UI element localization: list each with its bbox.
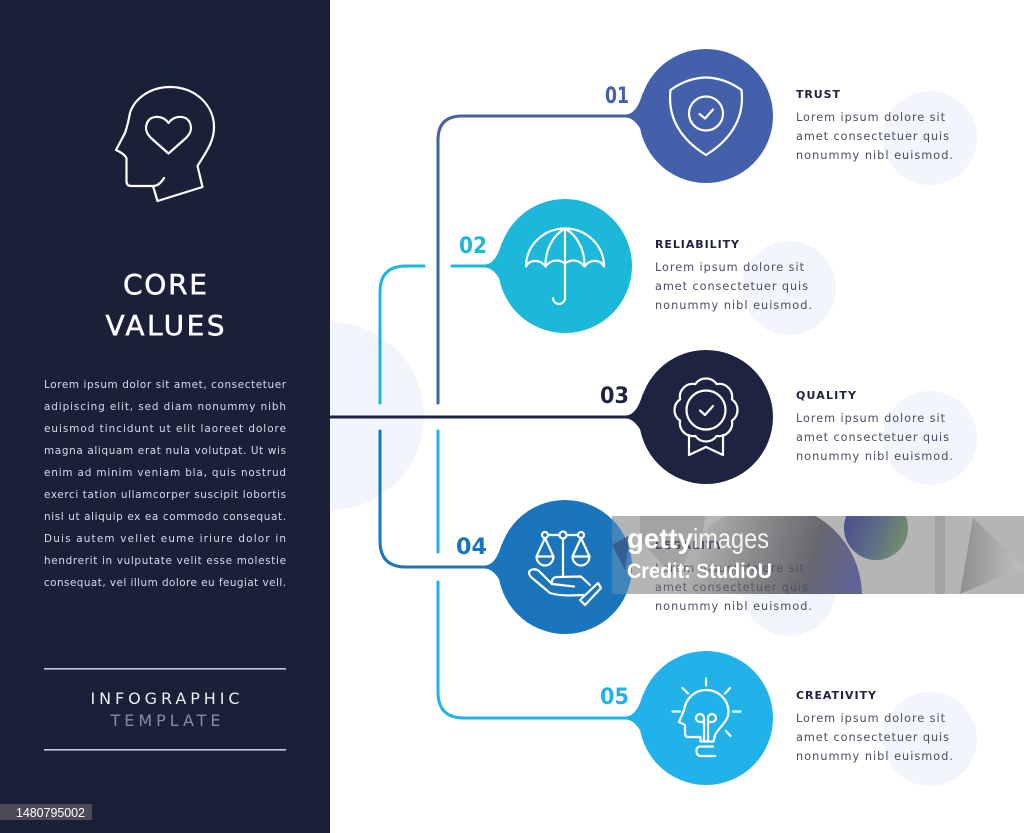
left panel bbox=[0, 0, 330, 833]
paragraph: euismod tincidunt ut elit laoreet dolore bbox=[44, 423, 286, 435]
icon: rosette badge bbox=[674, 378, 738, 455]
number 05: 05 bbox=[600, 685, 629, 710]
paragraph: consequat, vel illum dolore eu feugiat vell. bbox=[44, 577, 286, 589]
text: creativity: Lorem ipsum dolore sit bbox=[796, 712, 946, 725]
text: quality: QUALITY bbox=[796, 389, 857, 402]
watermark band: LEGALITY bbox=[655, 539, 724, 552]
text: creativity: amet consectetuer quis bbox=[796, 731, 949, 744]
watermark band bbox=[498, 496, 1024, 688]
number 01: 01 bbox=[605, 84, 629, 109]
number 02: 02 bbox=[459, 234, 487, 259]
text: reliability bbox=[655, 238, 812, 312]
item 01: trust bbox=[605, 49, 977, 185]
paragraph: hendrerit in vulputate velit esse molestie bbox=[44, 555, 286, 567]
heading: core values: VALUES bbox=[106, 309, 224, 342]
text: reliability: nonummy nibl euismod. bbox=[655, 299, 812, 312]
text: creativity bbox=[796, 689, 953, 763]
item 03: quality bbox=[600, 350, 977, 485]
paragraph: nisl ut aliquip ex ea commodo consequat. bbox=[44, 511, 286, 523]
text: trust: nonummy nibl euismod. bbox=[796, 149, 953, 162]
heading: core values: CORE bbox=[123, 268, 207, 301]
heading: core values bbox=[106, 268, 224, 342]
text: trust: TRUST bbox=[796, 88, 840, 101]
paragraph: magna aliquam erat nula volutpat. Ut wis bbox=[44, 445, 286, 457]
connector lines bbox=[331, 116, 630, 718]
text: trust bbox=[796, 88, 953, 162]
text: quality bbox=[796, 389, 953, 463]
paragraph: adipiscing elit, sed diam nonummy nibh bbox=[44, 401, 286, 413]
text: quality: amet consectetuer quis bbox=[796, 431, 949, 444]
item 04: integrity bbox=[456, 500, 836, 636]
text: trust: amet consectetuer quis bbox=[796, 130, 949, 143]
item 02: reliability bbox=[459, 199, 836, 335]
watermark text: Credit: StudioU bbox=[627, 560, 772, 583]
text: trust: Lorem ipsum dolore sit bbox=[796, 111, 946, 124]
item 05: creativity bbox=[600, 651, 977, 786]
label: infographic template: INFOGRAPHIC bbox=[90, 689, 240, 708]
icon: head light bulb bbox=[672, 678, 740, 756]
number 04: 04 bbox=[456, 535, 487, 560]
paragraph: Duis autem vellet eume iriure dolor in bbox=[44, 533, 286, 545]
image id tag: 1480795002 bbox=[16, 806, 85, 820]
text: creativity: CREATIVITY bbox=[796, 689, 877, 702]
text: reliability: amet consectetuer quis bbox=[655, 280, 808, 293]
text: creativity: nonummy nibl euismod. bbox=[796, 750, 953, 763]
label: infographic template: TEMPLATE bbox=[110, 711, 220, 730]
text: quality: nonummy nibl euismod. bbox=[796, 450, 953, 463]
icon: umbrella bbox=[526, 228, 604, 304]
watermark text: images bbox=[693, 523, 769, 554]
paragraph: exerci tation ullamcorper suscipit lobortis bbox=[44, 489, 286, 501]
label: infographic template bbox=[90, 689, 240, 730]
watermark band: amet consectetuer quis bbox=[655, 581, 808, 594]
watermark text: getty bbox=[627, 523, 693, 554]
paragraph bbox=[44, 379, 287, 589]
paragraph: Lorem ipsum dolor sit amet, consectetuer bbox=[44, 379, 287, 391]
text: quality: Lorem ipsum dolore sit bbox=[796, 412, 946, 425]
text: reliability: RELIABILITY bbox=[655, 238, 740, 251]
text: reliability: Lorem ipsum dolore sit bbox=[655, 261, 805, 274]
pale circle behind centre line bbox=[236, 322, 424, 510]
icon: head with heart bbox=[116, 87, 214, 201]
image id tag bbox=[0, 804, 92, 820]
watermark band: Lorem ipsum dolore sit bbox=[655, 562, 805, 575]
paragraph: enim ad minim veniam bla, quis nostrud bbox=[44, 467, 286, 479]
watermark text bbox=[627, 523, 772, 583]
icon: shield bbox=[670, 78, 742, 155]
icon: scales on hand bbox=[529, 532, 601, 605]
number 03: 03 bbox=[600, 384, 629, 409]
text: integrity: nonummy nibl euismod. bbox=[655, 600, 812, 613]
